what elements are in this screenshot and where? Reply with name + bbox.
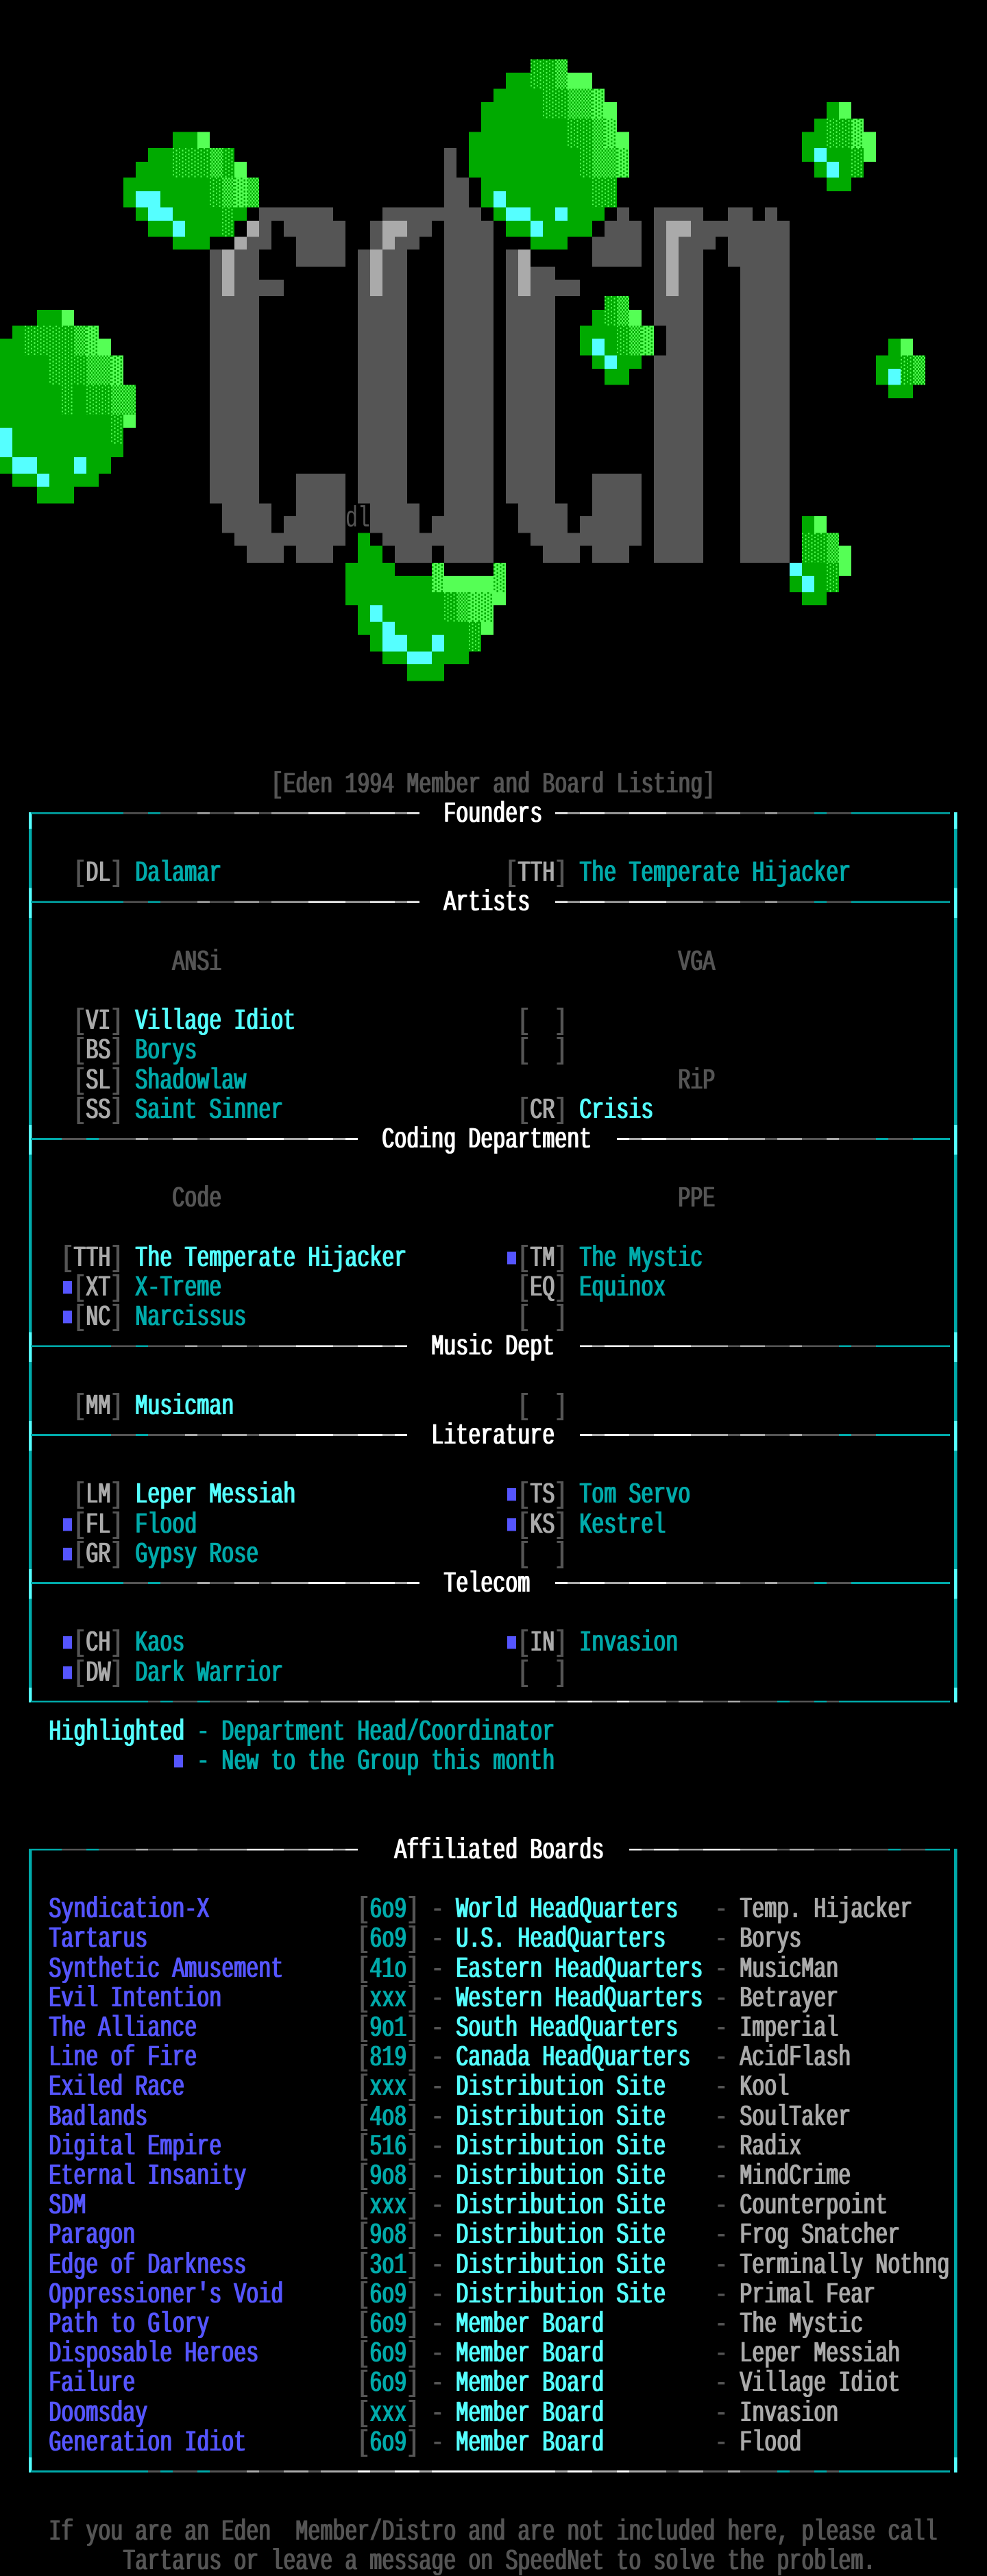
board: Digital Empire: - (430, 2131, 443, 2164)
board: Path to Glory: - (430, 2309, 443, 2342)
board: Paragon: - (430, 2220, 443, 2253)
board: Doomsday (0, 2400, 986, 2429)
heading: Telecom: Telecom (443, 1568, 530, 1602)
row: Flood and Kestrel (63, 1509, 666, 1542)
board: Paragon: Frog Snatcher (739, 2220, 900, 2253)
section: music dept (73, 1332, 567, 1424)
gem: small centre (580, 296, 654, 385)
board: Path to Glory: Member Board (455, 2309, 604, 2342)
board: Generation Idiot: - (430, 2427, 443, 2460)
board: Doomsday: Doomsday (48, 2398, 147, 2431)
heading: Music Dept: Music Dept (430, 1332, 555, 1365)
gem: far right (876, 339, 925, 398)
row: The Temperate Hijacker and The Mystic: [TM] (517, 1243, 567, 1276)
board: Edge of Darkness: - (714, 2250, 727, 2283)
row: Saint Sinner and Crisis: Saint Sinner (134, 1095, 283, 1128)
board: Oppressioner's Void: Primal Fear (739, 2279, 875, 2312)
board: Line of Fire: - (430, 2042, 443, 2076)
row: Narcissus: Narcissus (134, 1302, 246, 1335)
board: Digital Empire (0, 2133, 986, 2163)
board: Edge of Darkness: Edge of Darkness (48, 2250, 246, 2283)
section: telecom (63, 1568, 678, 1690)
row: Borys: [BS] (73, 1036, 123, 1069)
board: Exiled Race: Kool (739, 2072, 789, 2105)
row: Dalamar and The Temperate Hijacker: [TTH] (504, 858, 567, 891)
board: SDM: [xxx] (356, 2190, 419, 2224)
legend (48, 1716, 555, 1779)
letter 4 of logo (654, 207, 790, 563)
board: The Alliance (0, 2015, 986, 2044)
section: coding department (60, 1124, 715, 1335)
board: Doomsday: - (430, 2398, 443, 2431)
row: The Temperate Hijacker and The Mystic (60, 1243, 703, 1276)
board: Generation Idiot: Member Board (455, 2427, 604, 2460)
board: Doomsday: [xxx] (356, 2398, 419, 2431)
board: Disposable Heroes: Leper Messiah (739, 2338, 900, 2372)
row: Narcissus: [ ] (517, 1302, 567, 1335)
board: Badlands (0, 2104, 986, 2133)
subheadings: ANSi and VGA: VGA (677, 947, 715, 980)
board: Failure: Village Idiot (739, 2368, 900, 2401)
board: Evil Intention: - (714, 1983, 727, 2016)
row: The Temperate Hijacker and The Mystic: The Mystic (578, 1243, 703, 1276)
row: Musicman: [MM] (73, 1391, 123, 1424)
board: Doomsday: Invasion (739, 2398, 838, 2431)
board: Paragon: Paragon (48, 2220, 135, 2253)
board: Disposable Heroes: Member Board (455, 2338, 604, 2372)
legend: new members marker: New to the Group this month (221, 1746, 555, 1779)
row: Dark Warrior: [DW] (73, 1657, 123, 1690)
row: Leper Messiah and Tom Servo: Leper Messiah (134, 1480, 295, 1513)
board: Syndication-X: - (714, 1894, 727, 1928)
gem: large left (0, 310, 136, 503)
row: Flood and Kestrel: [KS] (517, 1509, 567, 1542)
legend: new members marker: - (196, 1746, 209, 1779)
board: Synthetic Amusement: - (430, 1954, 443, 1986)
board: Evil Intention: Evil Intention (48, 1983, 221, 2016)
board: Tartarus: Borys (739, 1924, 801, 1957)
board: The Alliance: South HeadQuarters (455, 2013, 678, 2046)
board: Evil Intention: - (430, 1983, 443, 2016)
board: Failure: [6o9] (356, 2368, 419, 2401)
letter 3 of logo (506, 207, 642, 563)
legend: highlighted names: - (196, 1716, 209, 1750)
row: Borys (73, 1036, 567, 1069)
row: Village Idiot: [VI] (73, 1006, 123, 1039)
board: SDM (0, 2192, 986, 2222)
section: artists (73, 888, 716, 1128)
row: Leper Messiah and Tom Servo (73, 1480, 690, 1513)
board: Generation Idiot: Generation Idiot (48, 2427, 246, 2460)
board: Line of Fire: - (714, 2042, 727, 2076)
board: Syndication-X: World HeadQuarters (455, 1894, 678, 1928)
row: Gypsy Rose: Gypsy Rose (134, 1539, 258, 1572)
board: Synthetic Amusement: MusicMan (739, 1954, 838, 1986)
board: Tartarus: - (430, 1924, 443, 1957)
row: Gypsy Rose: [ ] (517, 1539, 567, 1572)
board: Line of Fire (0, 2044, 986, 2074)
board: Synthetic Amusement (0, 1956, 986, 1985)
logo scaled to column units (0, 59, 925, 681)
board: Failure: - (430, 2368, 443, 2401)
row: Leper Messiah and Tom Servo: [TS] (517, 1480, 567, 1513)
row: Gypsy Rose (63, 1539, 567, 1572)
board: Synthetic Amusement: - (714, 1954, 727, 1986)
board: Tartarus (48, 1924, 801, 1957)
panel frame with section rules (29, 812, 957, 1703)
board: Failure: Failure (48, 2368, 135, 2401)
board: Digital Empire: Digital Empire (48, 2131, 221, 2164)
row: Flood and Kestrel: Flood (134, 1509, 197, 1542)
board: Evil Intention: [xxx] (356, 1983, 419, 2016)
heading: Affiliated Boards: Affiliated Boards (393, 1835, 604, 1868)
board: Badlands: - (430, 2102, 443, 2135)
boards panel frame (29, 1849, 957, 2472)
row: Kaos and Invasion: Invasion (578, 1628, 678, 1661)
board: Exiled Race (0, 2074, 986, 2104)
row: X-Treme and Equinox: Equinox (578, 1272, 666, 1306)
board: Disposable Heroes: [6o9] (356, 2338, 419, 2372)
row: Village Idiot: [ ] (517, 1006, 567, 1039)
board: Badlands: SoulTaker (739, 2102, 851, 2135)
heading: Artists: Artists (443, 888, 530, 921)
board: Edge of Darkness: [3o1] (356, 2250, 419, 2283)
board: Exiled Race: - (430, 2072, 443, 2105)
board: Oppressioner's Void: - (714, 2279, 727, 2312)
board: SDM: - (714, 2190, 727, 2224)
subheadings: Code and PPE: Code (171, 1184, 221, 1217)
row: Musicman: Musicman (134, 1391, 234, 1424)
subheadings: ANSi and VGA (171, 947, 716, 980)
board: Oppressioner's Void: [6o9] (356, 2279, 419, 2312)
panel: affiliated boards (29, 1835, 957, 2472)
board: Path to Glory (0, 2311, 986, 2340)
row: Shadowlaw and RiP: [SL] (73, 1065, 123, 1098)
row: Shadowlaw and RiP: Shadowlaw (134, 1065, 246, 1098)
row: Saint Sinner and Crisis: Crisis (578, 1095, 653, 1128)
row: Musicman: [ ] (517, 1391, 567, 1424)
title line: [Eden 1994 Member and Board Listing] (270, 769, 715, 802)
board: SDM: - (430, 2190, 443, 2224)
row: Narcissus: [NC] (73, 1302, 123, 1335)
row: Saint Sinner and Crisis: [SS] (73, 1095, 123, 1128)
row: X-Treme and Equinox: [XT] (73, 1272, 123, 1306)
board: Paragon: [9o8] (356, 2220, 419, 2253)
board: Digital Empire: [516] (356, 2131, 419, 2164)
row: Borys: Borys (134, 1036, 197, 1069)
row: The Temperate Hijacker and The Mystic: The Temperate Hijacker (134, 1243, 406, 1276)
board: Evil Intention (0, 1985, 986, 2015)
gem: large top centre (469, 59, 629, 250)
board: Syndication-X: Temp. Hijacker (739, 1894, 912, 1928)
board: Doomsday: - (714, 2398, 727, 2431)
board: Oppressioner's Void: Distribution Site (455, 2279, 666, 2312)
row: Borys: [ ] (517, 1036, 567, 1069)
board: Badlands: - (714, 2102, 727, 2135)
heading: Literature: Literature (430, 1420, 555, 1454)
row: The Temperate Hijacker and The Mystic: [TTH] (60, 1243, 123, 1276)
board: Generation Idiot (0, 2429, 986, 2459)
panel: member listing (29, 799, 957, 1703)
board: Exiled Race: Distribution Site (455, 2072, 666, 2105)
board: Edge of Darkness: - (430, 2250, 443, 2283)
row: Dark Warrior (63, 1657, 567, 1690)
gem: top right (802, 102, 876, 191)
board: Line of Fire: Line of Fire (48, 2042, 197, 2076)
row: Shadowlaw and RiP (73, 1065, 715, 1098)
board: Line of Fire: [819] (356, 2042, 419, 2076)
board: The Alliance: Imperial (739, 2013, 838, 2046)
letter 2 of logo (358, 148, 494, 563)
board: Line of Fire: AcidFlash (739, 2042, 851, 2076)
row: Dark Warrior: [ ] (517, 1657, 567, 1690)
board: Path to Glory: - (714, 2309, 727, 2342)
board: Digital Empire: Distribution Site (455, 2131, 666, 2164)
board: Syndication-X (48, 1894, 912, 1928)
row: Saint Sinner and Crisis (73, 1095, 653, 1128)
board: Failure: Member Board (455, 2368, 604, 2401)
board: Digital Empire: - (714, 2131, 727, 2164)
board: The Alliance: - (714, 2013, 727, 2046)
row: Leper Messiah and Tom Servo: [LM] (73, 1480, 123, 1513)
row: Kaos and Invasion: [CH] (73, 1628, 123, 1661)
board: Oppressioner's Void: - (430, 2279, 443, 2312)
row: Dalamar and The Temperate Hijacker (73, 858, 851, 891)
row: Narcissus (63, 1302, 567, 1335)
board: Oppressioner's Void: Oppressioner's Void (48, 2279, 283, 2312)
row: X-Treme and Equinox: X-Treme (134, 1272, 221, 1306)
board: Generation Idiot: Flood (739, 2427, 801, 2460)
row: Shadowlaw and RiP: RiP (677, 1065, 715, 1098)
row: X-Treme and Equinox: [EQ] (517, 1272, 567, 1306)
board: Line of Fire: Canada HeadQuarters (455, 2042, 690, 2076)
board: Eternal Insanity: MindCrime (739, 2161, 851, 2194)
board: Failure (0, 2370, 986, 2400)
board: Evil Intention: Western HeadQuarters (455, 1983, 703, 2016)
board: Oppressioner's Void (0, 2281, 986, 2311)
row: Village Idiot (73, 1006, 567, 1039)
heading: Coding Department: Coding Department (381, 1124, 592, 1158)
board: Paragon: - (714, 2220, 727, 2253)
board: Syndication-X: [6o9] (356, 1894, 419, 1928)
legend: highlighted names: Highlighted (48, 1716, 184, 1750)
board: Syndication-X: Syndication-X (48, 1894, 209, 1928)
board: Path to Glory: Path to Glory (48, 2309, 209, 2342)
board: Edge of Darkness: Terminally Nothng (739, 2250, 949, 2283)
board: Tartarus: - (714, 1924, 727, 1957)
row: Kaos and Invasion: Kaos (134, 1628, 184, 1661)
board: Eternal Insanity (0, 2163, 986, 2192)
board: Evil Intention: Betrayer (739, 1983, 838, 2016)
subheadings: Code and PPE (171, 1184, 715, 1217)
section: literature (63, 1420, 690, 1572)
row: Village Idiot: Village Idiot (134, 1006, 295, 1039)
board: Digital Empire: Radix (739, 2131, 801, 2164)
board: Syndication-X: - (430, 1894, 443, 1928)
section: founders (73, 799, 851, 891)
board: Eternal Insanity: Eternal Insanity (48, 2161, 246, 2194)
board: Paragon (0, 2222, 986, 2252)
gem: upper left (123, 132, 259, 250)
board: The Alliance: - (430, 2013, 443, 2046)
row: Gypsy Rose: [GR] (73, 1539, 123, 1572)
board: Synthetic Amusement: Eastern HeadQuarters (455, 1954, 703, 1986)
row: Dark Warrior: Dark Warrior (134, 1657, 283, 1690)
board: Tartarus: U.S. HeadQuarters (455, 1924, 666, 1957)
row: X-Treme and Equinox (63, 1272, 666, 1306)
row: Flood and Kestrel: Kestrel (578, 1509, 666, 1542)
row: Dalamar and The Temperate Hijacker: The Temperate Hijacker (578, 858, 851, 891)
board: Disposable Heroes: - (714, 2338, 727, 2372)
footer line 1: If you are an Eden Member/Distro and are not included here, please call (48, 2516, 937, 2549)
board: Badlands: Distribution Site (455, 2102, 666, 2135)
board: Eternal Insanity: Distribution Site (455, 2161, 666, 2194)
board: Synthetic Amusement: [41o] (356, 1954, 419, 1986)
row: Dalamar and The Temperate Hijacker: [DL] (73, 858, 123, 891)
board: Exiled Race: Exiled Race (48, 2072, 184, 2105)
board: Disposable Heroes: - (430, 2338, 443, 2372)
row: Kaos and Invasion (63, 1628, 678, 1661)
logo: Eden ANSI art with green gems (0, 59, 925, 681)
board: Path to Glory: The Mystic (739, 2309, 863, 2342)
board: Exiled Race: - (714, 2072, 727, 2105)
row: Leper Messiah and Tom Servo: Tom Servo (578, 1480, 690, 1513)
row: Flood and Kestrel: [FL] (73, 1509, 123, 1542)
board: SDM: Counterpoint (739, 2190, 888, 2224)
board: The Alliance: [9o1] (356, 2013, 419, 2046)
row: Dalamar and The Temperate Hijacker: Dalamar (134, 858, 221, 891)
board: SDM: SDM (48, 2190, 86, 2224)
legend: highlighted names: Department Head/Coordinator (221, 1716, 555, 1750)
row: Kaos and Invasion: [IN] (517, 1628, 567, 1661)
board: Synthetic Amusement: Synthetic Amusement (48, 1954, 283, 1986)
footer note (0, 2517, 987, 2576)
board: Exiled Race: [xxx] (356, 2072, 419, 2105)
row: Musicman (73, 1391, 567, 1424)
board: Paragon: Distribution Site (455, 2220, 666, 2253)
subheadings: Code and PPE: PPE (677, 1184, 715, 1217)
board: Disposable Heroes (0, 2340, 986, 2370)
gem: bottom centre (345, 533, 506, 681)
stray text behind logo: dl (345, 502, 370, 536)
heading: Founders: Founders (443, 799, 542, 831)
board: Eternal Insanity: [9o8] (356, 2161, 419, 2194)
board: Failure: - (714, 2368, 727, 2401)
board: Generation Idiot: [6o9] (356, 2427, 419, 2460)
letter 1 of logo (210, 207, 345, 563)
board: Tartarus: Tartarus (48, 1924, 147, 1957)
board: Badlands: [4o8] (356, 2102, 419, 2135)
legend: highlighted names (48, 1716, 555, 1750)
board: Tartarus: [6o9] (356, 1924, 419, 1957)
board: Doomsday: Member Board (455, 2398, 604, 2431)
board: Path to Glory: [6o9] (356, 2309, 419, 2342)
board: Edge of Darkness: Distribution Site (455, 2250, 666, 2283)
board: Edge of Darkness (0, 2252, 986, 2281)
subheadings: ANSi and VGA: ANSi (171, 947, 221, 980)
board: SDM: Distribution Site (455, 2190, 666, 2224)
board: The Alliance: The Alliance (48, 2013, 197, 2046)
board: Eternal Insanity: - (714, 2161, 727, 2194)
board: Disposable Heroes: Disposable Heroes (48, 2338, 258, 2372)
gem: lower right of logo (790, 516, 851, 605)
board: Badlands: Badlands (48, 2102, 147, 2135)
board: Eternal Insanity: - (430, 2161, 443, 2194)
row: Saint Sinner and Crisis: [CR] (517, 1095, 567, 1128)
board: Generation Idiot: - (714, 2427, 727, 2460)
